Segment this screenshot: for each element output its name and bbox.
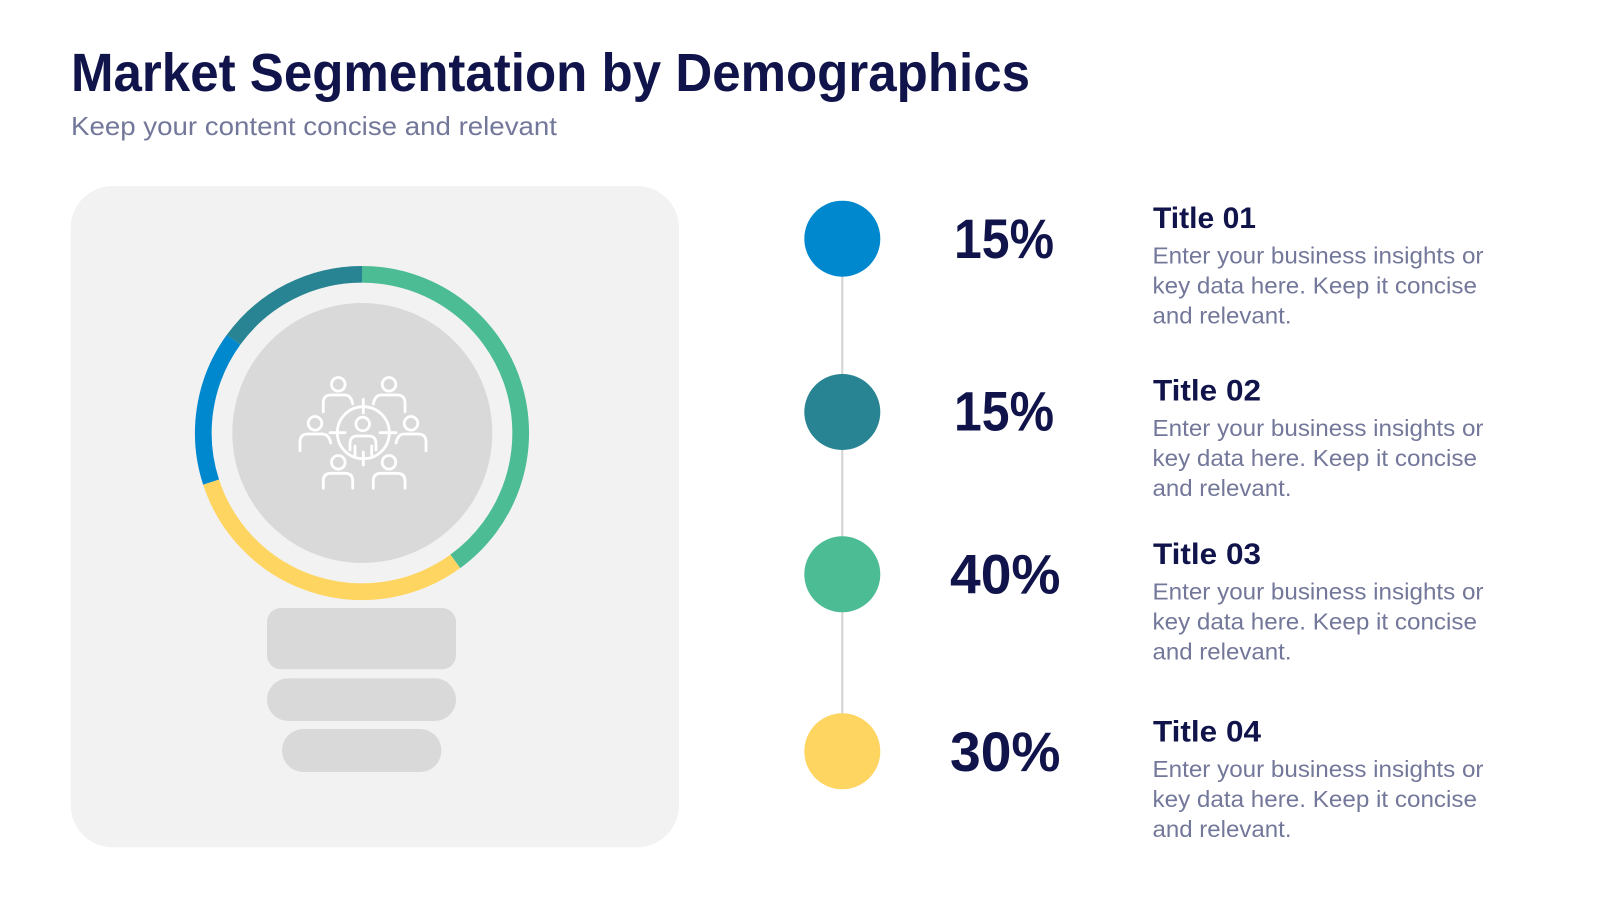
percentage 30%: 30% (950, 720, 1060, 783)
timeline connector (841, 238, 843, 751)
panel: light bulb illustration (71, 186, 679, 847)
ring segment: 40% green (362, 274, 521, 561)
icon: audience target (300, 378, 426, 488)
row 3 (804, 536, 1484, 664)
description 01: Enter your business insights or (1152, 242, 1484, 268)
description 01 (1152, 242, 1484, 328)
percentage 15%: 15% (954, 380, 1054, 442)
subtitle: Keep your content concise and relevant (71, 111, 558, 141)
description 04: key data here. Keep it concise (1152, 786, 1477, 812)
description 02: Enter your business insights or (1152, 415, 1484, 441)
heading: Title 03: Title 03 (1153, 538, 1261, 571)
bulb base bar 1 (267, 608, 456, 669)
bulb glass circle (232, 303, 492, 563)
percentage 15%: 15% (954, 207, 1054, 270)
dot: teal (804, 374, 880, 450)
description 01: and relevant. (1152, 302, 1292, 328)
description 03: Enter your business insights or (1152, 578, 1484, 604)
ring segment: 15% teal (234, 274, 362, 340)
row 2 (804, 374, 1484, 501)
dot: yellow (804, 713, 880, 789)
description 03: and relevant. (1152, 638, 1292, 664)
heading: Title 01: Title 01 (1153, 202, 1256, 235)
description 04: and relevant. (1152, 816, 1292, 842)
heading: Title 02: Title 02 (1153, 374, 1261, 408)
description 04 (1152, 756, 1484, 842)
description 04: Enter your business insights or (1152, 756, 1484, 782)
bulb base bar 3 (282, 729, 441, 772)
description 02 (1152, 415, 1484, 501)
percentage 40%: 40% (950, 542, 1060, 606)
bulb base bar 2 (267, 678, 456, 721)
ring segment: 15% blue (203, 340, 234, 482)
dot: blue (804, 201, 880, 277)
description 02: and relevant. (1152, 475, 1292, 501)
row 1 (804, 201, 1484, 328)
description 03 (1152, 578, 1484, 664)
title: Market Segmentation by Demographics (71, 43, 1030, 103)
donut chart ring (203, 274, 521, 592)
row 4 (804, 713, 1484, 842)
heading: Title 04: Title 04 (1153, 716, 1261, 749)
ring segment: 30% yellow (211, 482, 455, 592)
description 03: key data here. Keep it concise (1152, 608, 1477, 634)
dot: green (804, 536, 880, 612)
description 02: key data here. Keep it concise (1152, 445, 1477, 471)
description 01: key data here. Keep it concise (1152, 272, 1477, 298)
